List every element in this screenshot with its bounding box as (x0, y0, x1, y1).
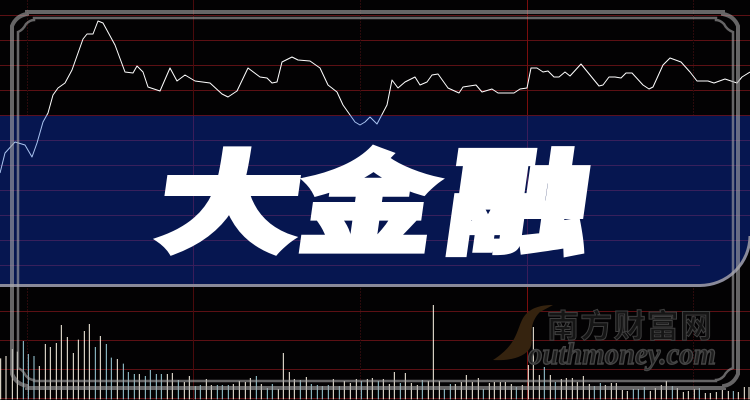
line chart (0, 21, 750, 173)
band outline (0, 236, 750, 286)
logo swoosh (493, 305, 553, 360)
title: 大 (150, 144, 310, 267)
panel: title band (0, 115, 750, 285)
logo latin name: outhmoney.com (528, 336, 716, 371)
title: 金 (291, 143, 446, 267)
title: 融 (440, 140, 601, 269)
logo chinese name: 南方财富网 (547, 308, 712, 344)
watermark logo (493, 305, 716, 371)
title (150, 140, 601, 269)
volume bars (1, 305, 749, 399)
